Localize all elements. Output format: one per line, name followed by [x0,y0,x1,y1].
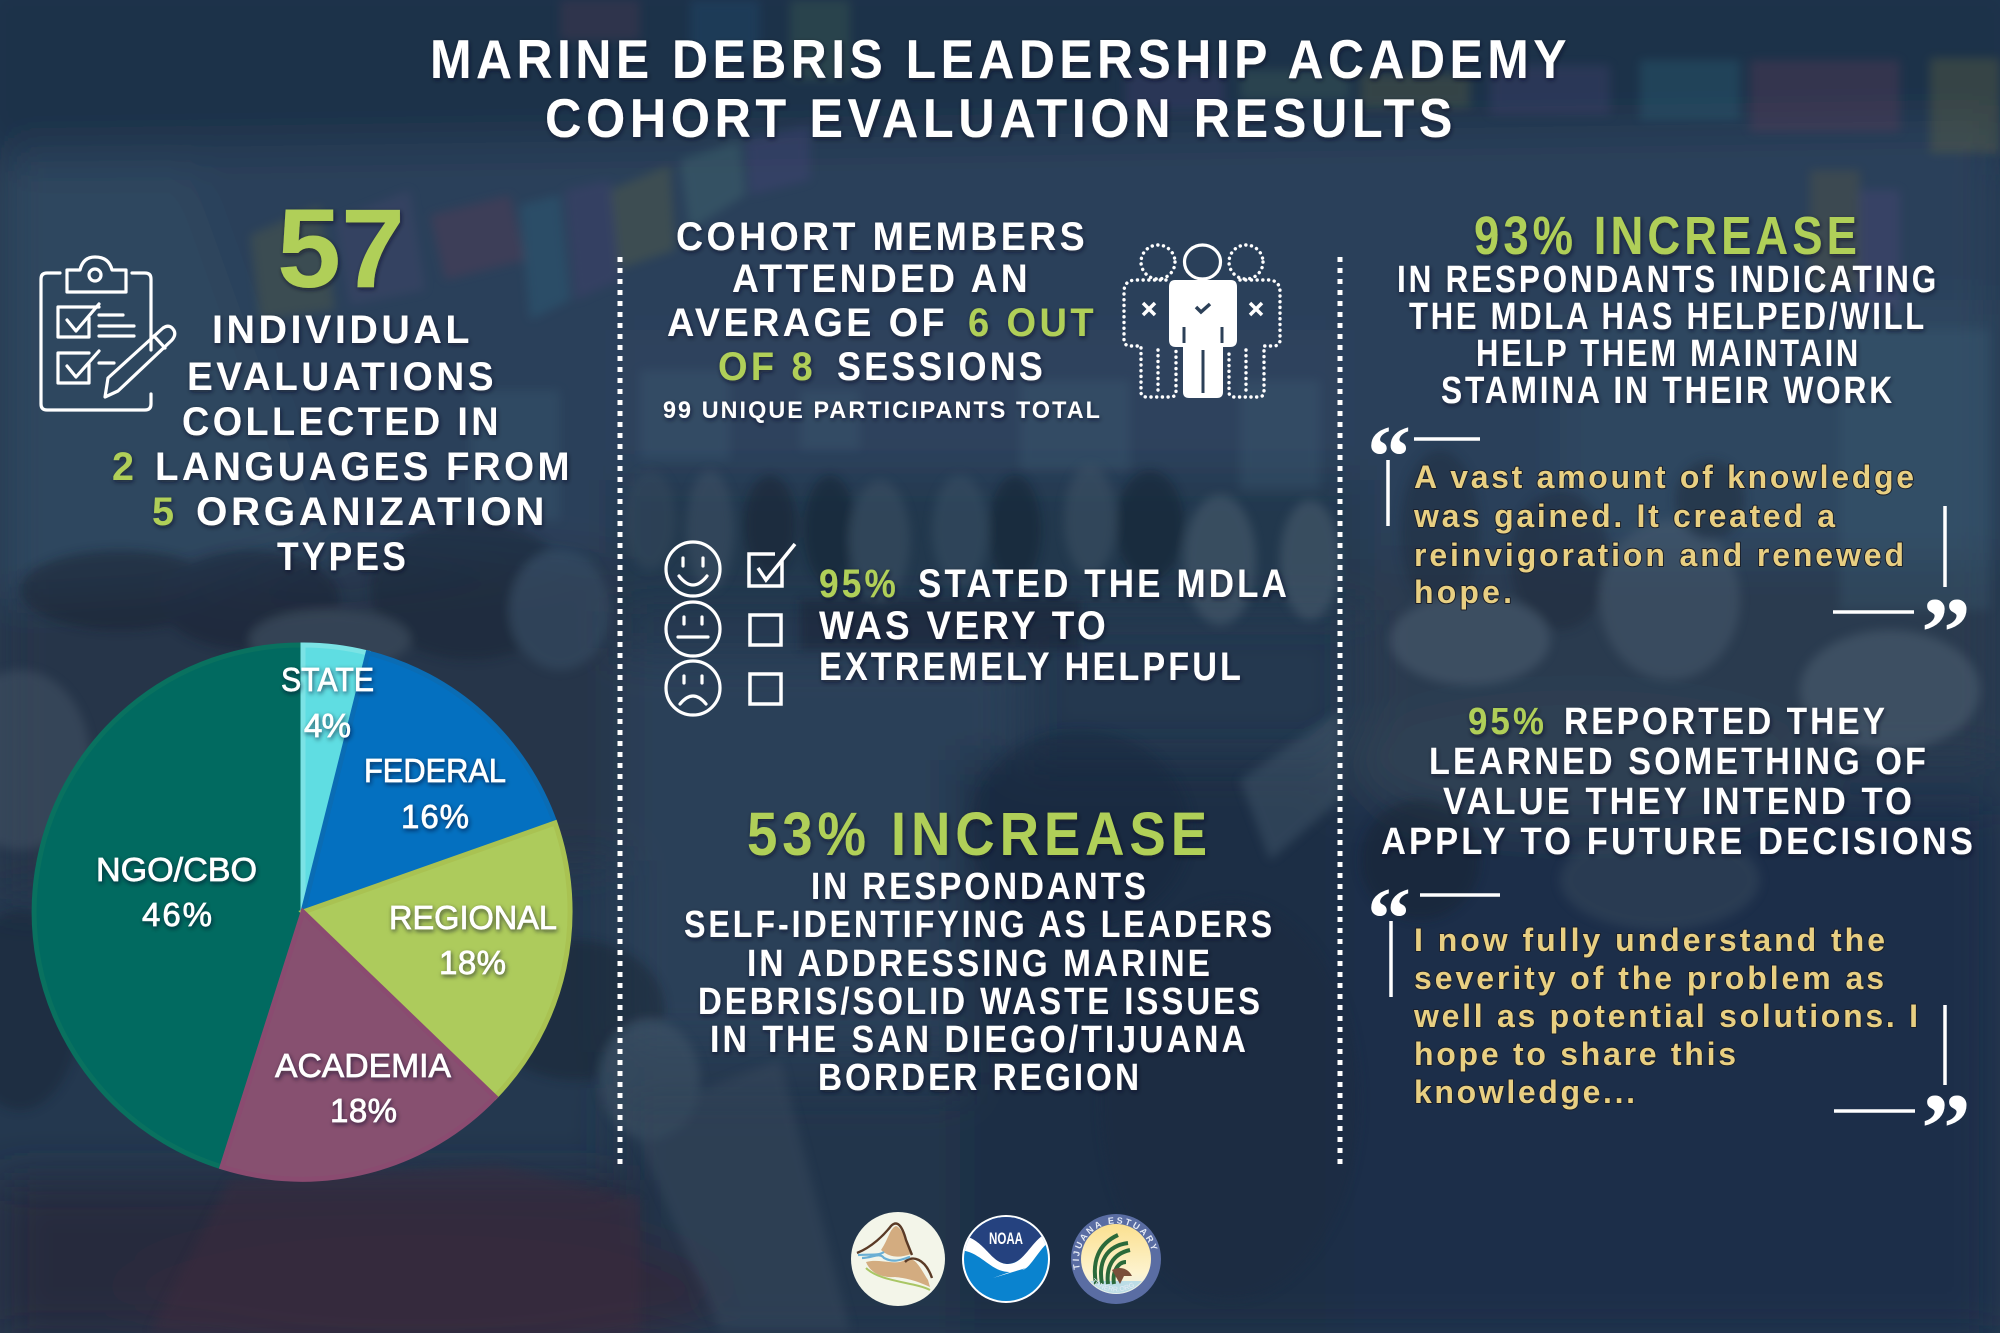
pie labels: REGIONAL [389,899,557,936]
panel: 95% reported: LEARNED SOMETHING OF [1429,741,1929,783]
text: attendance summary: AVERAGE OF [667,301,948,345]
callout: quote one [1367,409,1971,688]
text: evaluations description: TYPES [277,535,409,579]
text: attendance summary [663,215,1102,424]
text: leaders description: IN RESPONDANTS [811,866,1149,908]
icon: checkboxes [749,544,795,704]
panel: attendance [663,215,1280,424]
panel: 95% reported: REPORTED THEY [1564,701,1888,743]
text: helpfulness result: 95% [819,562,899,606]
text: leaders description [684,866,1275,1099]
panel: 95% reported: 95% [1468,701,1547,743]
text: leaders description: IN THE SAN DIEGO/TIJUANA [710,1019,1249,1061]
callout: quote two: knowledge... [1414,1074,1635,1110]
slice: federal 16% [303,653,555,912]
text: stamina description [1397,259,1939,412]
icon: smile, neutral and frown rating faces [666,542,720,715]
text: attendance summary: 99 UNIQUE PARTICIPANTS TOTAL [663,397,1102,424]
pie labels: ACADEMIA [275,1047,451,1084]
text: stamina description: HELP THEM MAINTAIN [1476,333,1861,375]
callout: quote one: was gained. It created a [1413,498,1835,534]
text: attendance summary: OF 8 [718,345,816,389]
logo: academy emblem [851,1212,945,1306]
callout: quote two: “ [1367,871,1411,968]
text: evaluations description: 5 [152,490,174,534]
pie labels: 18% [330,1092,397,1129]
text: evaluations description: ORGANIZATION [196,490,548,534]
callout: quote two: I now fully understand the [1414,922,1885,958]
pie labels: 46% [142,896,212,933]
divider right [1338,257,1342,1165]
logo: Tijuana Estuary: TRNERR.ORG [1092,1278,1134,1292]
text: helpfulness result [819,562,1290,689]
text: attendance summary: COHORT MEMBERS [676,215,1088,259]
text: evaluations description: EVALUATIONS [187,355,497,399]
pie labels: FEDERAL [364,752,506,789]
text: leaders description: DEBRIS/SOLID WASTE ISSUES [698,981,1263,1023]
big number 57: 57 [277,186,405,311]
callout: quote two: severity of the problem as [1414,960,1884,996]
panel: 53% increase [684,800,1275,1099]
pie labels: STATE [281,661,374,698]
heading: 93% increase: 93% INCREASE [1474,206,1861,266]
divider left [618,257,622,1165]
right column people [1400,450,1480,610]
foreground [970,730,1190,930]
panel: 95% reported: VALUE THEY INTEND TO [1443,781,1915,823]
panel: helpfulness rating [666,542,1290,715]
text: evaluations description: INDIVIDUAL [212,308,473,352]
panel: evaluations collected [41,186,573,579]
heading: 53% increase: 53% INCREASE [747,800,1212,868]
logo: Tijuana Estuary [1071,1214,1161,1304]
text: leaders description: SELF-IDENTIFYING AS LEADERS [684,904,1275,946]
logo: Tijuana Estuary: TIJUANA ESTUARY [1072,1217,1158,1270]
windows [640,370,730,460]
text: attendance summary: SESSIONS [837,345,1046,389]
flags [560,0,640,40]
panel: 95% reported [1381,701,1976,863]
text: evaluations description: COLLECTED IN [182,400,502,444]
pie labels: 4% [304,707,351,744]
left crowd [20,550,220,630]
text: attendance summary: 6 OUT [968,301,1097,345]
pie chart: organization types [34,645,570,1179]
text: helpfulness result: STATED THE MDLA [918,562,1290,606]
pie labels: 18% [439,944,506,981]
callout: quote two [1367,871,1971,1184]
logo: NOAA: NOAA [989,1229,1023,1248]
text: stamina description: STAMINA IN THEIR WORK [1441,370,1895,412]
icon: clipboard with checklist and pencil [41,257,175,410]
slice: NGO/CBO 46% [34,645,303,1167]
title: MARINE DEBRIS LEADERSHIP ACADEMY [430,28,1571,90]
logos [851,1212,1161,1306]
title: COHORT EVALUATION RESULTS [545,87,1457,149]
title [430,28,1571,149]
text: helpfulness result: EXTREMELY HELPFUL [819,645,1244,689]
pie labels: NGO/CBO [96,851,257,888]
callout: quote two: ” [1921,1073,1971,1184]
text: helpfulness result: WAS VERY TO [819,604,1109,648]
seated row [624,470,676,570]
slice: academia 18% [222,912,495,1179]
text: evaluations description: LANGUAGES FROM [155,445,573,489]
slice: state 4% [303,645,368,912]
callout: quote one: ” [1921,577,1971,688]
icon: group with one person selected [1124,245,1280,398]
text: leaders description: BORDER REGION [818,1057,1142,1099]
panel: 93% increase [1397,206,1939,412]
callout: quote one: “ [1367,409,1411,506]
pie labels [96,661,557,1129]
text: attendance summary: ATTENDED AN [732,257,1031,301]
callout: quote two: hope to share this [1414,1036,1736,1072]
pie labels: 16% [401,798,469,835]
callout: quote one: reinvigoration and renewed [1414,537,1904,573]
logo: NOAA [960,1215,1052,1303]
callout: quote two: well as potential solutions. I [1413,998,1918,1034]
text: leaders description: IN ADDRESSING MARINE [747,943,1213,985]
slice: regional 18% [303,823,570,1097]
text: evaluations description: 2 [112,445,134,489]
callout: quote one: A vast amount of knowledge [1414,459,1914,495]
callout: quote one: hope. [1414,574,1512,610]
text: evaluations description [112,308,573,579]
